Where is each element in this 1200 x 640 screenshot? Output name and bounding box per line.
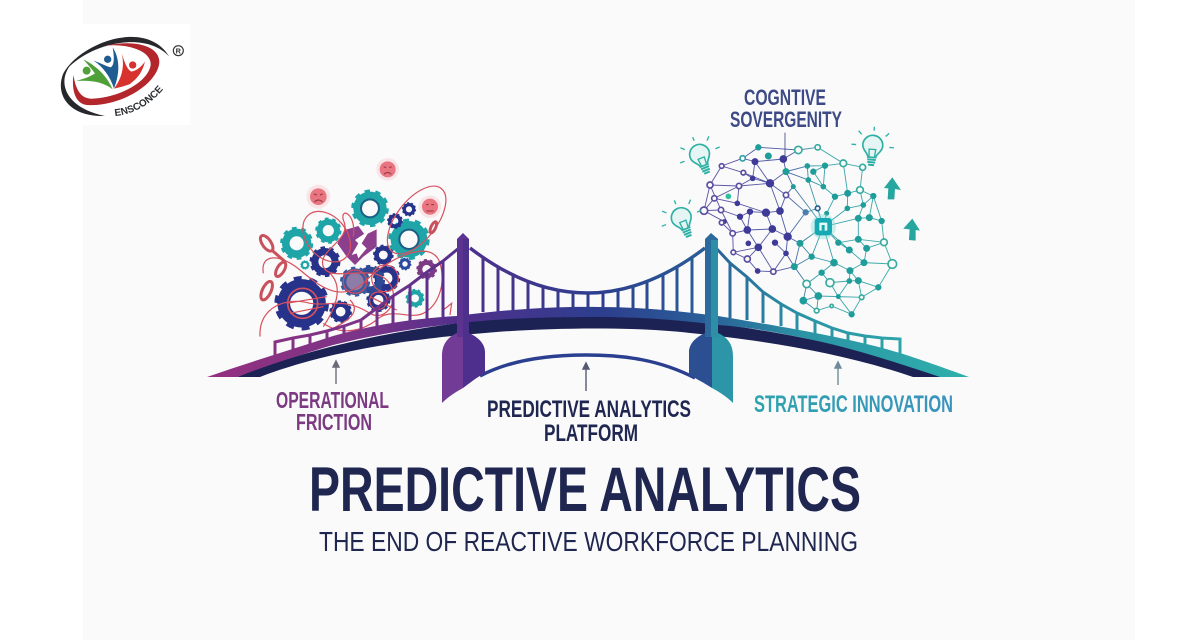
logo red head [129, 61, 136, 69]
lightbulb icon 3 [850, 125, 896, 167]
label: operational friction [276, 387, 389, 435]
center hangers [483, 257, 692, 315]
growth arrow 1 [884, 177, 901, 199]
logo green head [83, 67, 91, 75]
sad face 2 [376, 158, 399, 181]
label: cognitive sovereignty: SOVERGENITY [730, 107, 842, 132]
teal hollow nodes [795, 145, 897, 313]
label: cognitive sovereignty: COGNTIVE [744, 85, 826, 110]
logo blue head [104, 56, 111, 63]
label: predictive analytics platform: PREDICTIVE ANALYTICS [487, 396, 691, 423]
main suspension cable [470, 248, 705, 293]
purple hollow nodes [700, 156, 820, 274]
logo blue figure [93, 47, 118, 88]
under arch [480, 355, 695, 378]
logo wordmark [115, 83, 168, 116]
logo green figure [76, 59, 113, 89]
pointer arrow: platform [583, 363, 589, 391]
network edges [704, 147, 892, 314]
illustration: cognitive network [655, 125, 920, 317]
label: predictive analytics platform: PLATFORM [544, 420, 638, 447]
title: PREDICTIVE ANALYTICS [309, 455, 861, 525]
left tower base [442, 333, 485, 403]
growth arrow 2 [903, 219, 920, 241]
central chip [811, 214, 836, 239]
sad face 1 [306, 185, 330, 209]
label: operational friction: OPERATIONAL [276, 387, 389, 413]
label: operational friction: FRICTION [296, 409, 372, 435]
registered mark: R [176, 46, 182, 55]
illustration: bridge [207, 233, 969, 403]
shattered purple center [337, 226, 377, 265]
lightbulb icon 2 [655, 192, 708, 244]
lightbulb icon 1 [673, 129, 727, 181]
label: predictive analytics platform [487, 396, 691, 447]
red tangled threads [260, 176, 457, 337]
navy gears [277, 203, 436, 327]
label leader line [784, 133, 786, 158]
left tower [457, 233, 469, 337]
shatter highlight [352, 230, 370, 258]
label: strategic innovation: STRATEGIC INNOVATION [754, 391, 953, 418]
logo red swoosh [73, 43, 159, 105]
subtitle: THE END OF REACTIVE WORKFORCE PLANNING [319, 526, 858, 557]
teal gears [282, 192, 427, 307]
logo: Ensconce: ENSCONCE [114, 85, 163, 116]
illustration: operational friction gears [258, 158, 457, 337]
label: cognitive sovereignty [730, 85, 842, 132]
broken red chain [258, 221, 438, 302]
deck underside [237, 312, 945, 377]
right side cable and rail [716, 248, 900, 355]
deck top [207, 307, 969, 377]
teal nodes [726, 145, 884, 317]
logo: Ensconce [60, 36, 184, 116]
neutral face 3 [419, 195, 441, 218]
right tower [705, 233, 718, 337]
logo red figure [114, 53, 145, 89]
purple nodes [722, 156, 808, 273]
right tower base [689, 333, 733, 403]
logo black swoosh [61, 37, 169, 116]
pointer arrow: operational friction [333, 361, 339, 384]
pointer arrow: strategic innovation [835, 362, 841, 385]
left side cable and rail [275, 248, 459, 356]
